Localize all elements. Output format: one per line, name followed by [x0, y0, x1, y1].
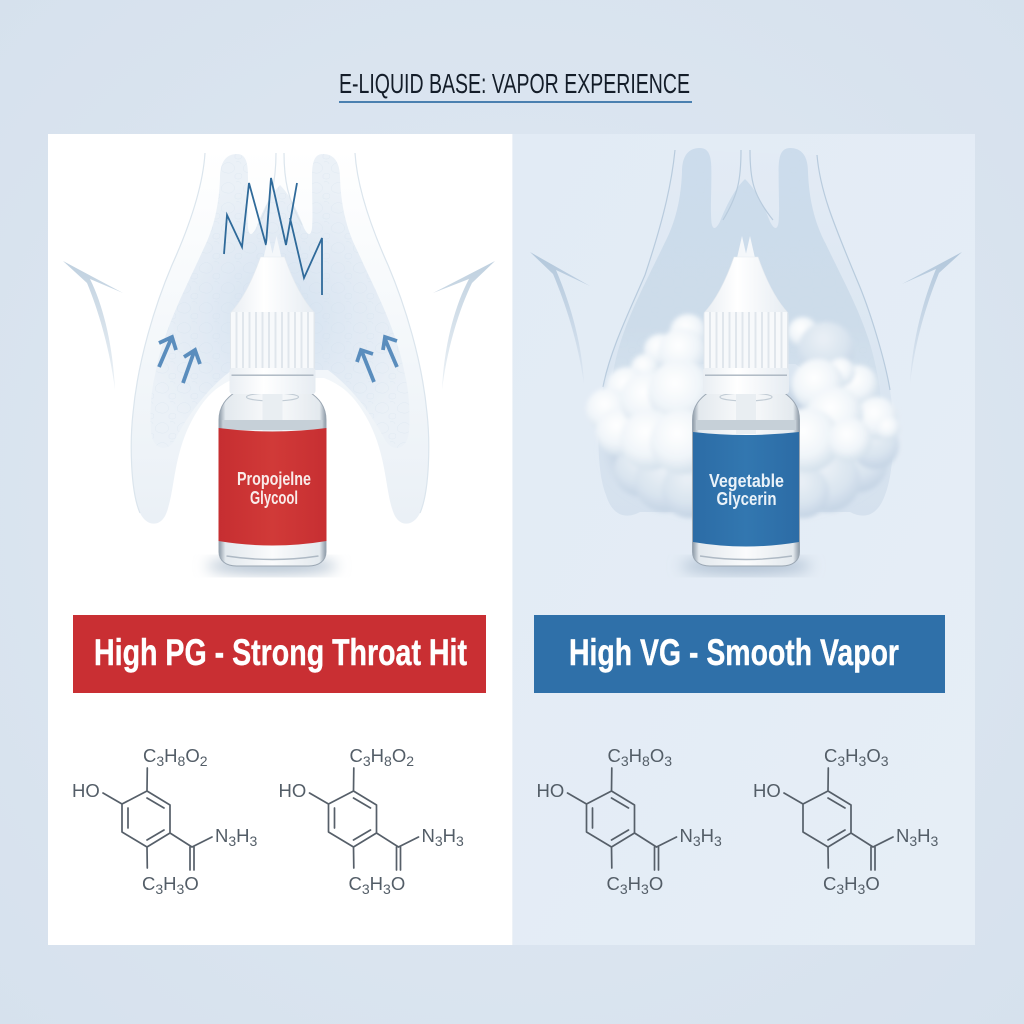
molecule 4: H — [845, 745, 859, 766]
molecule 1: 3 — [250, 833, 258, 849]
molecule 2: 3 — [383, 881, 391, 897]
molecule 1: C — [142, 873, 155, 894]
molecule 3 — [536, 745, 722, 897]
molecule 4: 3 — [881, 753, 889, 769]
molecule 3: 3 — [714, 833, 722, 849]
molecule 1: 3 — [155, 881, 163, 897]
molecule 2: H — [443, 825, 456, 846]
title underline — [339, 101, 692, 103]
molecule 2: H — [371, 745, 384, 766]
molecule 2: 3 — [435, 833, 443, 849]
molecule 4 — [753, 745, 939, 897]
molecule 2: 2 — [406, 753, 414, 769]
label text second line: Glycool — [250, 488, 298, 508]
molecule 2: O — [391, 873, 405, 894]
banner text: High PG - Strong Throat Hit — [94, 632, 467, 673]
molecule 4: H — [917, 825, 931, 846]
molecule 3: 3 — [621, 753, 629, 769]
molecule 3: 3 — [693, 833, 701, 849]
arrow: outer right swoosh — [433, 261, 495, 390]
molecule 4: 3 — [931, 833, 939, 849]
molecule 3: C — [606, 873, 620, 894]
molecule 1: 3 — [177, 881, 185, 897]
bottle shadow — [680, 559, 812, 573]
bottle: vegetable glycerin — [692, 236, 800, 566]
molecule 3: O — [649, 873, 663, 894]
arrow: outer left swoosh — [530, 252, 590, 384]
molecule 2: O — [392, 745, 406, 766]
molecule 4: 3 — [837, 753, 845, 769]
bottle: propylene glycol — [218, 236, 326, 566]
molecule 1: O — [184, 873, 199, 894]
molecule 1: C — [143, 745, 156, 766]
molecule 1 — [72, 745, 258, 897]
molecule 4: HO — [753, 780, 781, 801]
molecule 2: C — [348, 873, 362, 894]
molecule 3: N — [680, 825, 693, 846]
molecule 2: 3 — [456, 833, 464, 849]
molecule 3: C — [608, 745, 621, 766]
molecule 4: C — [823, 873, 836, 894]
molecule 2: H — [370, 873, 383, 894]
molecule 4: N — [896, 825, 909, 846]
molecule 2: HO — [278, 780, 306, 801]
molecule 4: O — [865, 873, 880, 894]
panel background — [48, 134, 512, 945]
molecule 4: H — [844, 873, 858, 894]
molecule 3: 3 — [664, 753, 672, 769]
label text second line: Glycerin — [716, 489, 776, 509]
label text: Vegetable — [709, 471, 784, 491]
banner: high PG — [73, 615, 486, 693]
arrow: outer right swoosh — [902, 252, 962, 384]
molecule 3: H — [628, 873, 641, 894]
panel background — [513, 134, 975, 945]
molecule 1: 2 — [200, 753, 208, 769]
panel: high PG — [48, 134, 512, 945]
molecule 4: 3 — [858, 881, 866, 897]
molecule 3: HO — [536, 780, 564, 801]
molecule 4: 3 — [836, 881, 844, 897]
banner text: High VG - Smooth Vapor — [569, 632, 899, 673]
molecule 2: C — [350, 745, 363, 766]
title: E-LIQUID BASE: VAPOR EXPERIENCE — [339, 68, 690, 99]
molecule 1: 3 — [228, 833, 236, 849]
molecule 2: 3 — [363, 753, 371, 769]
molecule 1: N — [215, 825, 228, 846]
banner: high VG — [534, 615, 945, 693]
illustration: throat and lungs — [598, 148, 893, 516]
molecule 1: H — [164, 745, 178, 766]
blue label — [693, 432, 799, 546]
molecule 3: H — [701, 825, 714, 846]
molecule 4: 3 — [909, 833, 917, 849]
arrow: outer left swoosh — [63, 261, 123, 390]
label text: Propojelne — [237, 469, 311, 489]
molecule 3: H — [629, 745, 642, 766]
molecule 1: H — [163, 873, 177, 894]
arrows: airflow up — [159, 337, 397, 383]
icon: irritation zigzag — [224, 178, 322, 295]
vapor cloud — [586, 314, 900, 518]
panel: high VG — [513, 134, 975, 945]
molecule 1: H — [236, 825, 250, 846]
molecule 3: 3 — [641, 881, 649, 897]
molecule 2 — [278, 745, 464, 897]
red label — [218, 428, 326, 546]
molecule 1: O — [185, 745, 200, 766]
bottle shadow — [206, 559, 338, 573]
molecule 4: C — [824, 745, 837, 766]
molecule 2: 8 — [384, 753, 392, 769]
molecule 1: HO — [72, 780, 100, 801]
molecule 3: 3 — [620, 881, 628, 897]
molecule 3: O — [650, 745, 664, 766]
molecule 1: 3 — [156, 753, 164, 769]
molecule 2: N — [422, 825, 435, 846]
molecule 2: 3 — [362, 881, 370, 897]
molecule 4: O — [866, 745, 881, 766]
molecule 1: 8 — [178, 753, 186, 769]
molecule 4: 3 — [859, 753, 867, 769]
illustration: throat and lungs — [131, 150, 429, 524]
molecule 3: 8 — [642, 753, 650, 769]
